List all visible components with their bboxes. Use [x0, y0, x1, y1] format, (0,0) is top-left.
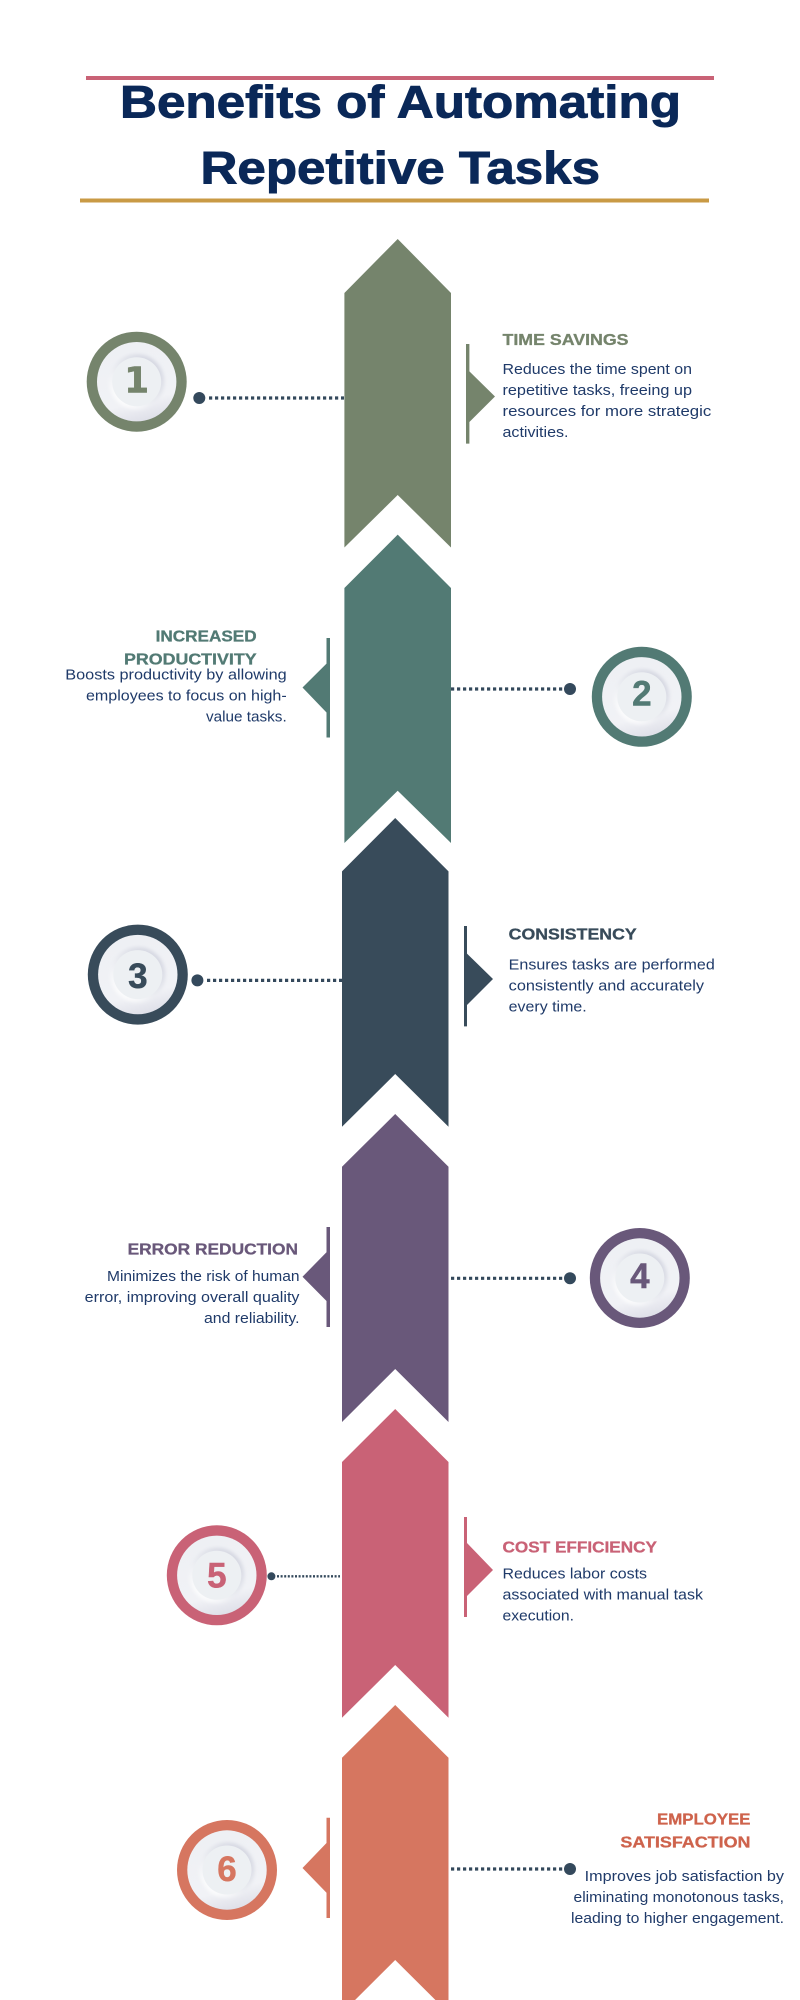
title text	[120, 76, 681, 193]
number badge 6	[177, 1820, 277, 1920]
text: employee satisfaction: Improves job satisfaction by	[585, 1869, 785, 1885]
step 4: error reduction	[85, 1114, 690, 1422]
text: error reduction: and reliability.	[204, 1311, 300, 1327]
text: increased productivity: Boosts productivity by allowing	[65, 667, 287, 683]
title text: Benefits of Automating	[120, 76, 681, 127]
number badge 2: 2	[632, 675, 652, 714]
text: time savings	[502, 332, 711, 441]
text: error reduction	[85, 1241, 300, 1327]
number badge 2	[592, 647, 692, 747]
connector 3	[191, 974, 342, 986]
text: employee satisfaction: eliminating monotonous tasks,	[574, 1890, 784, 1906]
text: increased productivity: PRODUCTIVITY	[124, 651, 257, 668]
text: error reduction: ERROR REDUCTION	[128, 1241, 298, 1258]
text: cost efficiency: COST EFFICIENCY	[502, 1539, 657, 1556]
arrow segment 2	[344, 535, 451, 843]
text: time savings: resources for more strategic	[502, 404, 711, 420]
step 2: increased productivity	[65, 535, 692, 843]
connector 4	[451, 1272, 576, 1284]
text: increased productivity: value tasks.	[206, 709, 287, 725]
arrow segment 6	[342, 1705, 448, 2000]
step 5: cost efficiency	[167, 1409, 704, 1718]
text: increased productivity: employees to focus on high-	[86, 688, 287, 704]
text: consistency	[509, 927, 715, 1016]
text: employee satisfaction	[571, 1811, 785, 1927]
number badge 3: 3	[128, 957, 148, 996]
top rule	[86, 76, 714, 80]
connector 1	[193, 392, 344, 404]
callout pointer 2	[302, 638, 330, 738]
text: consistency: CONSISTENCY	[509, 927, 637, 944]
connector 2	[451, 683, 576, 695]
number badge 4	[590, 1228, 690, 1328]
text: consistency: Ensures tasks are performed	[509, 958, 715, 974]
text: employee satisfaction: leading to higher engagement.	[571, 1911, 784, 1927]
text: cost efficiency: Reduces labor costs	[502, 1566, 647, 1582]
text: employee satisfaction: EMPLOYEE	[657, 1811, 750, 1828]
number badge 1	[87, 332, 187, 432]
title block	[80, 76, 714, 202]
number badge 5: 5	[207, 1557, 227, 1596]
connector 6	[451, 1863, 576, 1875]
text: time savings: activities.	[502, 425, 568, 441]
text: cost efficiency	[502, 1539, 704, 1624]
number badge 3	[88, 925, 188, 1025]
number badge 6: 6	[217, 1850, 237, 1889]
callout pointer 1	[466, 344, 495, 444]
number badge 4: 4	[630, 1257, 650, 1296]
text: increased productivity: INCREASED	[156, 628, 257, 645]
text: error reduction: error, improving overall quality	[85, 1290, 300, 1306]
arrow segment 5	[342, 1409, 448, 1718]
text: time savings: Reduces the time spent on	[502, 362, 692, 378]
text: cost efficiency: execution.	[502, 1608, 574, 1624]
text: time savings: TIME SAVINGS	[502, 332, 628, 349]
arrow segment 4	[342, 1114, 448, 1422]
title text: Repetitive Tasks	[200, 142, 600, 193]
step 6: employee satisfaction	[177, 1705, 785, 2000]
text: error reduction: Minimizes the risk of human	[107, 1269, 300, 1285]
text: increased productivity	[65, 628, 287, 725]
text: consistency: consistently and accurately	[509, 979, 705, 995]
bottom rule	[80, 198, 709, 202]
arrow segment 1	[344, 239, 451, 548]
step 3: consistency	[88, 818, 715, 1127]
arrow segment 3	[342, 818, 448, 1127]
number badge 5	[167, 1525, 267, 1625]
text: employee satisfaction: SATISFACTION	[620, 1835, 750, 1852]
number badge 1: 1	[124, 361, 149, 402]
text: time savings: repetitive tasks, freeing up	[502, 383, 692, 399]
callout pointer 6	[302, 1818, 330, 1918]
callout pointer 5	[464, 1517, 493, 1617]
callout pointer 4	[302, 1227, 330, 1327]
text: consistency: every time.	[509, 1000, 587, 1016]
connector 5	[267, 1572, 340, 1580]
callout pointer 3	[464, 926, 493, 1026]
text: cost efficiency: associated with manual task	[502, 1587, 704, 1603]
step 1: time savings	[87, 239, 711, 548]
